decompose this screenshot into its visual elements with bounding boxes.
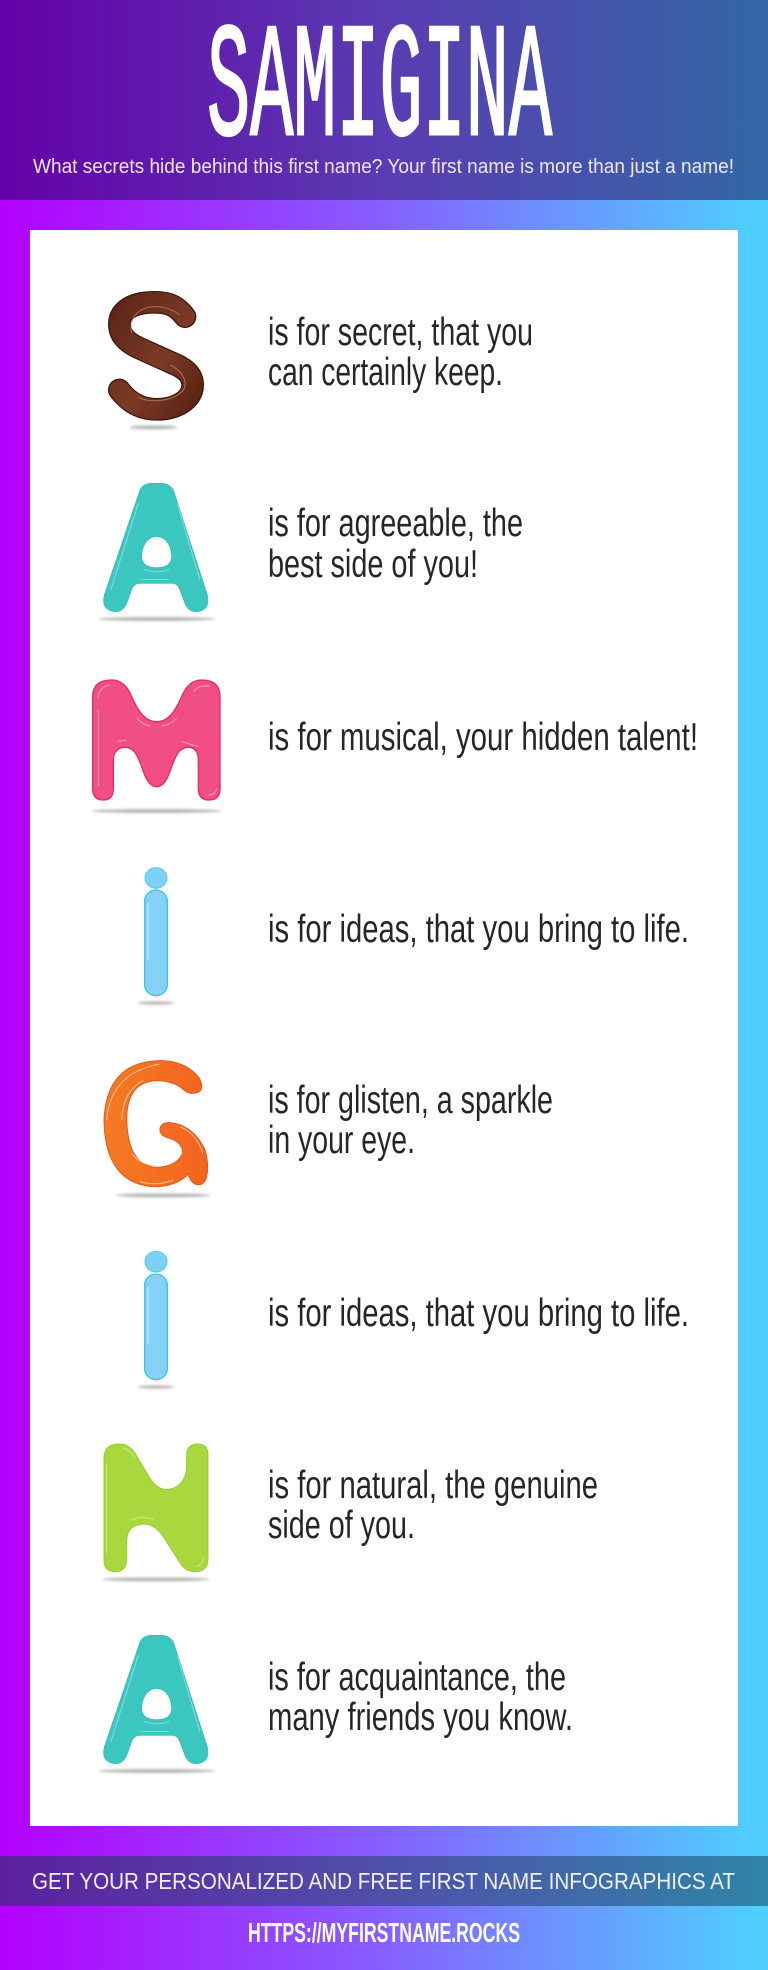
footer url: HTTPS://MYFIRSTNAME.ROCKS bbox=[248, 1917, 520, 1948]
footer band bbox=[0, 1856, 768, 1906]
row 4: i bbox=[138, 868, 689, 1005]
icon: letter i bbox=[138, 1251, 174, 1389]
text bbox=[268, 1464, 598, 1547]
header band bbox=[0, 0, 768, 200]
white content panel bbox=[30, 230, 738, 1826]
text: side of you. bbox=[268, 1504, 415, 1547]
text: best side of you! bbox=[268, 543, 478, 586]
row 7: N bbox=[102, 1444, 598, 1581]
row 8: A bbox=[98, 1635, 573, 1773]
text: can certainly keep. bbox=[268, 351, 503, 394]
row 5: G bbox=[104, 1061, 553, 1197]
icon: letter G bbox=[104, 1061, 211, 1197]
icon: letter S bbox=[119, 302, 193, 429]
text: is for agreeable, the bbox=[268, 502, 523, 545]
icon: letter A bbox=[98, 483, 215, 621]
text: is for natural, the genuine bbox=[268, 1464, 598, 1507]
text bbox=[268, 1656, 573, 1739]
text: is for glisten, a sparkle bbox=[268, 1079, 553, 1122]
text bbox=[268, 311, 533, 394]
text bbox=[268, 1079, 553, 1162]
row 6: i bbox=[138, 1251, 689, 1389]
subtitle: What secrets hide behind this first name? Your first name is more than just a name! bbox=[33, 156, 734, 178]
text: many friends you know. bbox=[268, 1696, 573, 1739]
text: is for acquaintance, the bbox=[268, 1656, 566, 1699]
text bbox=[268, 502, 523, 586]
icon: letter M bbox=[92, 680, 222, 813]
icon: letter N bbox=[102, 1444, 210, 1581]
row 1: S bbox=[119, 302, 533, 429]
text: in your eye. bbox=[268, 1119, 415, 1162]
row 3: M bbox=[92, 680, 698, 813]
row 2: A bbox=[98, 483, 523, 621]
icon: letter i bbox=[138, 868, 174, 1005]
icon: letter A bbox=[98, 1635, 215, 1773]
text: is for secret, that you bbox=[268, 311, 533, 354]
